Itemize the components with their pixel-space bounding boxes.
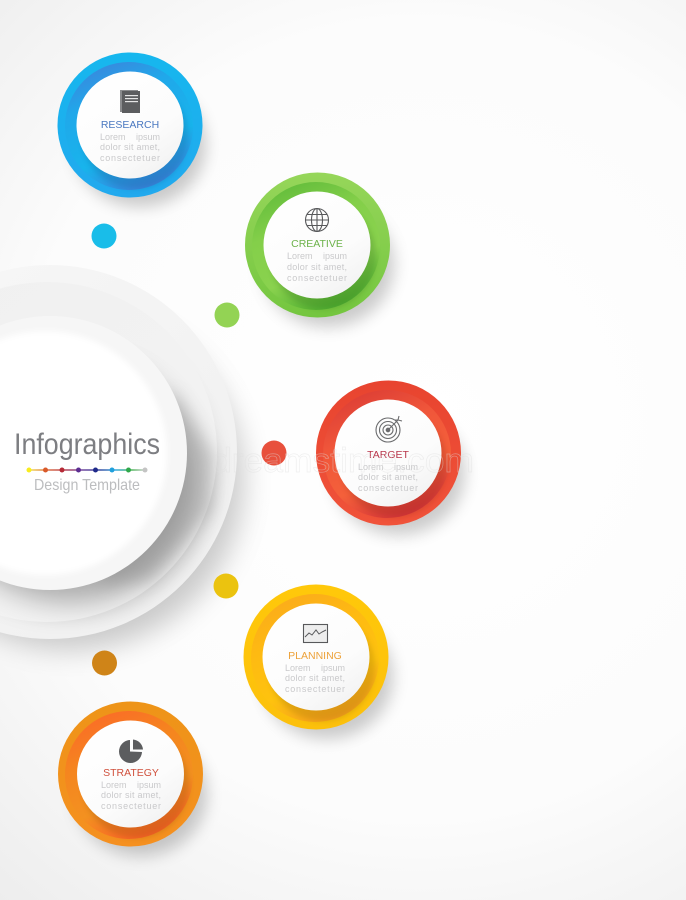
heading: strategy: STRATEGY (103, 767, 159, 779)
body text: target: dolor sit amet, (358, 472, 418, 482)
body text: planning: consectetuer (285, 684, 345, 694)
body text: creative: ipsum (323, 251, 347, 261)
body text: planning: dolor sit amet, (285, 673, 345, 683)
body text: planning: ipsum (321, 663, 345, 673)
icon: document (120, 90, 140, 113)
body text: strategy: consectetuer (101, 801, 161, 811)
body text: research (100, 132, 160, 163)
body text: creative (287, 251, 347, 283)
body text: research: consectetuer (100, 153, 160, 163)
card: creative (245, 172, 394, 327)
central circle stack (0, 265, 244, 650)
icon: line chart (304, 624, 328, 642)
body text: target: ipsum (394, 462, 418, 472)
body text: creative: Lorem (287, 251, 313, 261)
body text: planning: Lorem (285, 663, 311, 673)
icon: globe (306, 208, 328, 232)
body text: research: ipsum (136, 132, 160, 142)
card: strategy (58, 702, 207, 856)
body text: strategy: ipsum (137, 780, 161, 790)
body text: research: Lorem (100, 132, 126, 142)
icon: pie chart (119, 740, 143, 763)
body text: creative: consectetuer (287, 273, 347, 283)
body text: research: dolor sit amet, (100, 142, 160, 152)
subtitle: Design Template (34, 477, 140, 494)
title dotted colour line (26, 468, 148, 472)
body text: target: consectetuer (358, 483, 418, 493)
body text: target: Lorem (358, 462, 384, 472)
connector dots (92, 224, 286, 676)
card: target (316, 380, 465, 535)
heading: creative: CREATIVE (291, 238, 343, 250)
body text: creative: dolor sit amet, (287, 262, 347, 272)
icon: target (376, 416, 402, 442)
heading: research: RESEARCH (101, 119, 159, 131)
body text: strategy (101, 780, 161, 811)
card: research (58, 52, 206, 207)
heading: planning: PLANNING (288, 650, 342, 662)
card: planning (244, 584, 393, 739)
body text: planning (285, 663, 345, 694)
body text: strategy: dolor sit amet, (101, 790, 161, 800)
heading: target: TARGET (367, 449, 409, 461)
body text: strategy: Lorem (101, 780, 127, 790)
title: Infographics (14, 428, 160, 461)
body text: target (358, 462, 418, 493)
watermark: dreamstime.com (212, 442, 474, 480)
